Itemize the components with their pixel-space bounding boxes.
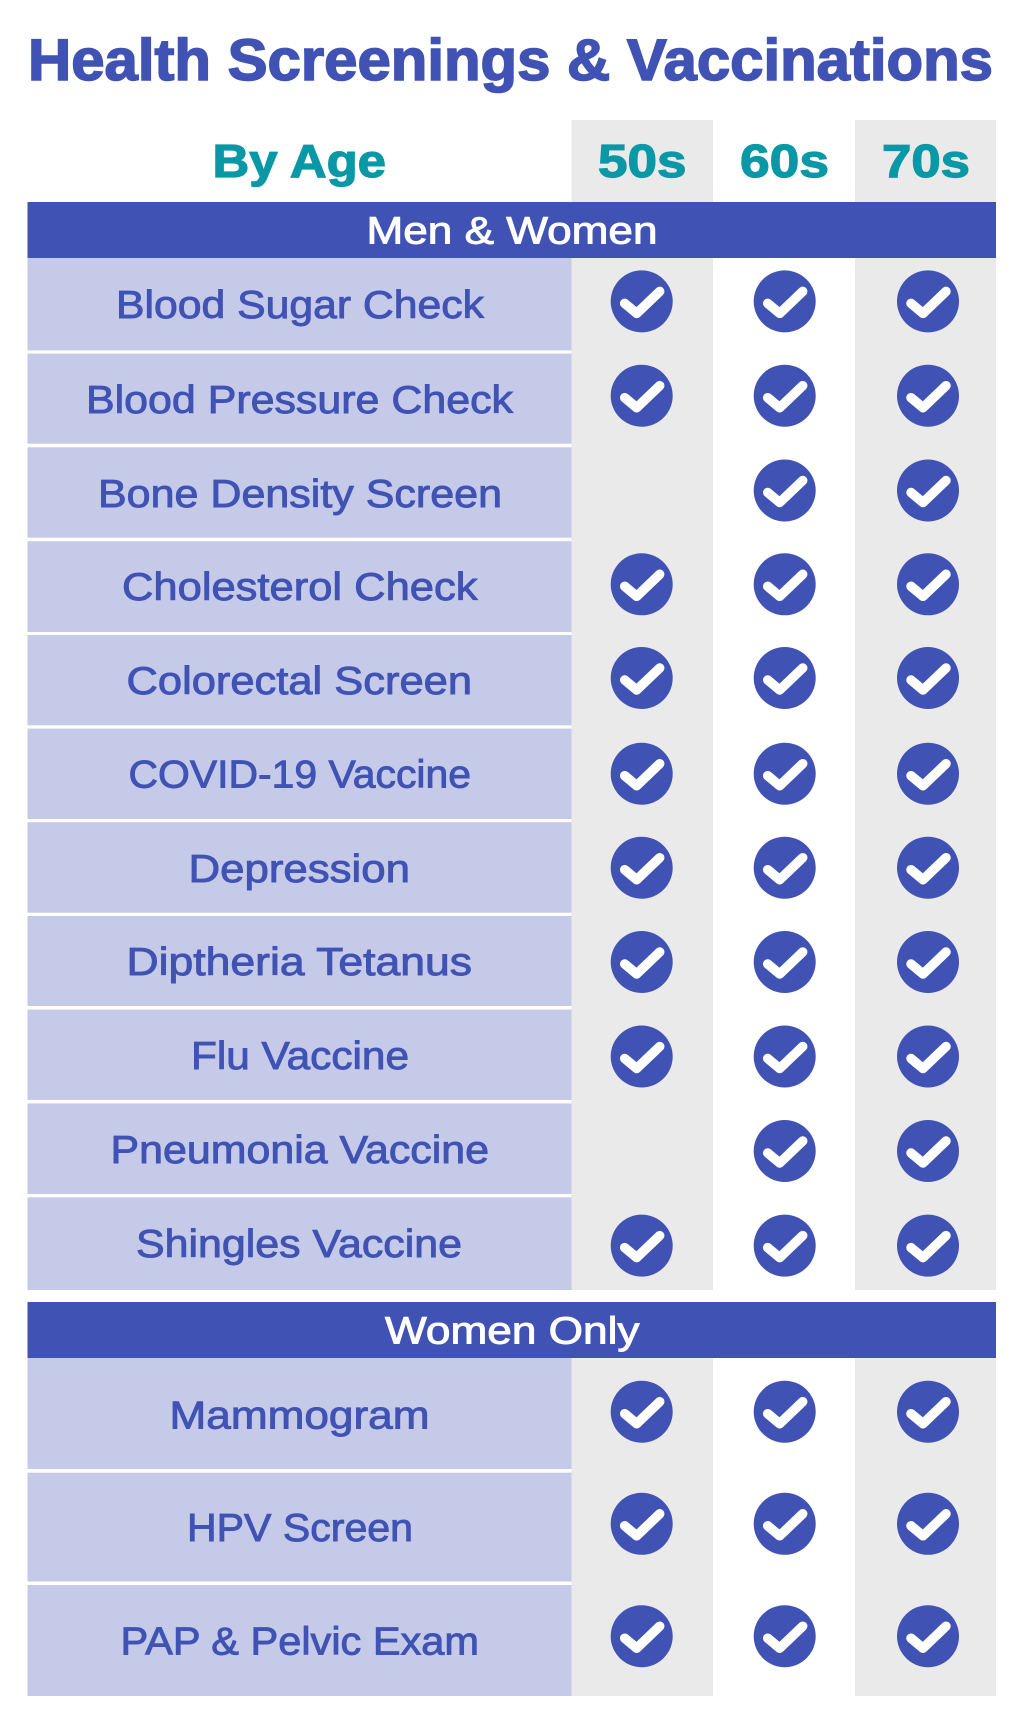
row: HPV Screen xyxy=(28,1473,572,1582)
heading: 50s: 50s xyxy=(598,135,686,187)
row: Flu Vaccine: Flu Vaccine xyxy=(191,1035,409,1078)
checks: 70s column, men and women xyxy=(897,270,959,1277)
banner: Women Only xyxy=(28,1302,996,1358)
row: Blood Sugar Check: Blood Sugar Check xyxy=(116,284,485,327)
row: Pneumonia Vaccine: Pneumonia Vaccine xyxy=(110,1129,489,1172)
row: Blood Pressure Check: Blood Pressure Check xyxy=(86,379,514,422)
row: HPV Screen: HPV Screen xyxy=(187,1507,413,1550)
banner: Men & Women xyxy=(28,202,996,258)
row: Mammogram: Mammogram xyxy=(170,1394,430,1438)
row: Shingles Vaccine xyxy=(28,1197,572,1290)
heading: By Age: By Age xyxy=(212,135,386,187)
banner: Men & Women: Men & Women xyxy=(366,210,658,252)
row: COVID-19 Vaccine xyxy=(28,729,572,819)
row: Diptheria Tetanus: Diptheria Tetanus xyxy=(126,941,472,984)
checks: women only xyxy=(611,1381,959,1667)
row: Flu Vaccine xyxy=(28,1010,572,1100)
heading: 70s: 70s xyxy=(882,135,970,187)
checks: 50s column, men and women xyxy=(611,270,673,1277)
row: Colorectal Screen xyxy=(28,635,572,725)
row: PAP & Pelvic Exam xyxy=(28,1585,572,1696)
row: Shingles Vaccine: Shingles Vaccine xyxy=(136,1223,462,1266)
row: Bone Density Screen xyxy=(28,447,572,538)
panel: men and women age columns xyxy=(572,258,996,1290)
row: Pneumonia Vaccine xyxy=(28,1103,572,1194)
row: Cholesterol Check xyxy=(28,541,572,632)
row: Colorectal Screen: Colorectal Screen xyxy=(126,660,472,703)
checks: 60s column, men and women xyxy=(754,270,816,1277)
row: COVID-19 Vaccine: COVID-19 Vaccine xyxy=(128,754,471,797)
row: Diptheria Tetanus xyxy=(28,916,572,1006)
row: Depression: Depression xyxy=(188,848,410,891)
row: Bone Density Screen: Bone Density Screen xyxy=(98,473,502,516)
row: Cholesterol Check: Cholesterol Check xyxy=(122,566,478,609)
heading: 60s: 60s xyxy=(740,135,829,187)
row: Blood Sugar Check xyxy=(28,258,572,350)
panel: women only age columns xyxy=(572,1358,996,1696)
title: Health Screenings & Vaccinations xyxy=(28,28,993,93)
row: Depression xyxy=(28,822,572,913)
row: Mammogram xyxy=(28,1358,572,1469)
column header backgrounds xyxy=(572,120,996,202)
banner: Women Only: Women Only xyxy=(385,1310,640,1352)
row: PAP & Pelvic Exam: PAP & Pelvic Exam xyxy=(120,1620,479,1663)
row: Blood Pressure Check xyxy=(28,354,572,444)
